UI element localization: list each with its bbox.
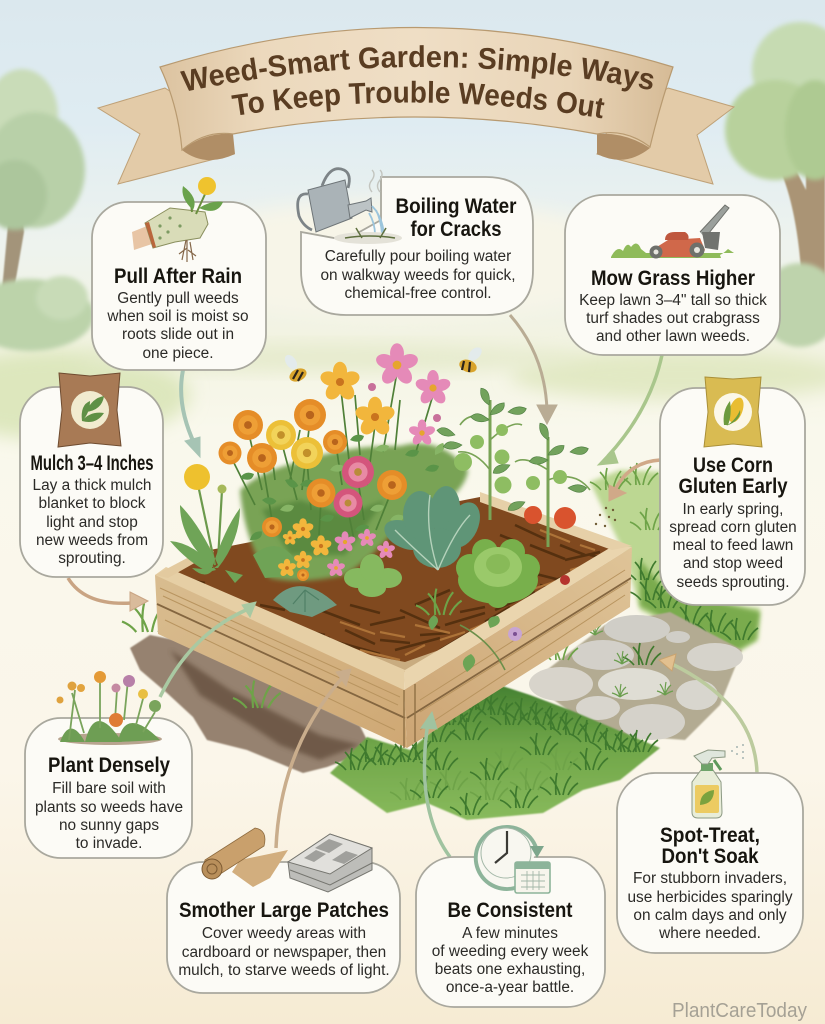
body text: and stop weed <box>683 555 783 572</box>
arrow: spot-treat to path <box>659 654 757 773</box>
icon: lawn mower <box>611 205 734 258</box>
raised wooden garden bed <box>155 492 632 748</box>
body text: and other lawn weeds. <box>596 328 750 345</box>
panel: be consistent <box>416 827 605 1007</box>
weeds in mulch <box>416 589 462 615</box>
icon: mulch bag <box>58 373 121 447</box>
dandelion weed <box>197 480 222 565</box>
body text: where needed. <box>658 925 761 942</box>
arrow: mulch to bed <box>68 578 148 611</box>
panel: plant densely <box>25 671 192 858</box>
corn gluten seed specks <box>595 507 616 527</box>
body text: Lay a thick mulch <box>33 477 151 494</box>
tree: right background <box>725 22 825 347</box>
body text: Cover weedy areas with <box>202 925 366 942</box>
arrow: pull after rain to bed <box>181 370 200 457</box>
heading: Pull After Rain <box>114 265 242 288</box>
body text: once-a-year battle. <box>446 979 574 996</box>
heading <box>678 454 788 498</box>
body text: Gently pull weeds <box>117 290 239 307</box>
lettuce <box>456 539 540 608</box>
banner right tail <box>597 88 734 184</box>
body text: mulch, to starve weeds of light. <box>178 962 390 979</box>
panel: boiling water <box>298 169 533 315</box>
title banner <box>96 26 735 185</box>
ground: bare soil patch <box>130 635 372 773</box>
arrow: boiling water to bed <box>510 315 557 424</box>
icon: clock and calendar <box>476 827 550 893</box>
heading: Plant Densely <box>48 754 170 777</box>
mulch surface <box>165 497 613 673</box>
body text: roots slide out in <box>122 326 234 343</box>
body text: meal to feed lawn <box>673 537 793 554</box>
icon: newspaper stack <box>288 834 372 892</box>
arrow: mow grass to lawn <box>598 355 662 465</box>
cardboard edge in mulch <box>345 648 445 672</box>
grass tuft at left of bed <box>122 603 171 632</box>
body text: Keep lawn 3–4" tall so thick <box>579 292 767 309</box>
plants: raised bed flowers and vegetables <box>170 343 590 672</box>
icon: corn gluten bag <box>704 377 762 447</box>
heading: Be Consistent <box>448 899 573 922</box>
body text: sprouting. <box>58 550 126 567</box>
heading: Boiling Water <box>396 195 516 218</box>
ground: foreground grass <box>330 682 660 820</box>
ground: stone path <box>529 612 743 740</box>
panel: pull after rain <box>92 177 266 370</box>
heading: Smother Large Patches <box>179 899 389 922</box>
heading: Mulch 3–4 Inches <box>30 452 154 475</box>
icon: spray bottle <box>692 744 744 818</box>
body text: new weeds from <box>36 532 148 549</box>
heading <box>396 195 516 241</box>
body text: spread corn gluten <box>669 519 797 536</box>
panel: spot-treat <box>617 744 803 953</box>
body text: blanket to block <box>39 495 146 512</box>
arrow: plant densely to bed <box>160 602 256 697</box>
icon: cardboard roll <box>202 828 288 887</box>
banner fold right <box>597 134 650 160</box>
wood sides <box>155 573 407 748</box>
heading: for Cracks <box>410 218 502 241</box>
kale <box>380 485 487 568</box>
banner fold left <box>182 134 235 160</box>
body text: In early spring, <box>683 501 783 518</box>
body text: use herbicides sparingly <box>627 889 793 906</box>
small yellow flower plant <box>253 546 303 578</box>
title text <box>180 45 654 118</box>
tree: left background <box>0 69 94 351</box>
body text: of weeding every week <box>432 943 589 960</box>
panel: mulch <box>20 373 163 577</box>
watermark: PlantCareToday <box>672 1000 807 1022</box>
body text: cardboard or newspaper, then <box>182 944 386 961</box>
green herb plant <box>344 554 402 597</box>
body text: Fill bare soil with <box>52 780 166 797</box>
title text: To Keep Trouble Weeds Out <box>231 80 604 118</box>
title text: Weed-Smart Garden: Simple Ways <box>180 45 654 92</box>
heading: Spot-Treat, <box>660 824 760 847</box>
body text: one piece. <box>142 345 214 362</box>
body text: turf shades out crabgrass <box>586 310 760 327</box>
panel: mow grass higher <box>565 195 780 355</box>
panel: smother large patches <box>167 828 400 993</box>
arrow: be consistent to bed <box>421 712 450 857</box>
body text: For stubborn invaders, <box>633 870 787 887</box>
body text: beats one exhausting, <box>435 961 585 978</box>
arrow: smother patches to bed <box>276 669 351 848</box>
body text: no sunny gaps <box>59 817 159 834</box>
bee left <box>282 353 309 384</box>
bee right <box>457 345 484 375</box>
banner left tail <box>98 88 234 184</box>
arrow: corn gluten to lawn <box>609 460 660 501</box>
panel: corn gluten <box>660 377 805 605</box>
body text: plants so weeds have <box>35 799 183 816</box>
banner main <box>160 28 673 150</box>
icon: dense plants <box>56 671 162 745</box>
weed in bare soil <box>233 680 280 708</box>
body text: chemical-free control. <box>344 285 492 302</box>
icon: watering can <box>298 169 402 244</box>
body text: on walkway weeds for quick, <box>320 267 516 284</box>
heading: Use Corn <box>693 454 773 477</box>
heading: Mow Grass Higher <box>591 267 755 290</box>
heading: Don't Soak <box>662 845 759 868</box>
icon: hand pulling weed <box>132 177 223 262</box>
foliage mass <box>240 443 468 581</box>
body text: light and stop <box>46 514 138 531</box>
heading: Gluten Early <box>678 475 788 498</box>
body text: when soil is moist so <box>106 308 249 325</box>
body text: A few minutes <box>462 925 558 942</box>
body text: seeds sprouting. <box>677 574 789 591</box>
body text: on calm days and only <box>633 907 787 924</box>
tomato plants <box>490 400 548 547</box>
body text: Carefully pour boiling water <box>325 248 511 265</box>
ground: grass at right of raised bed <box>590 463 760 652</box>
body text: to invade. <box>76 835 142 852</box>
flower heads <box>374 343 420 387</box>
heading <box>660 824 760 868</box>
